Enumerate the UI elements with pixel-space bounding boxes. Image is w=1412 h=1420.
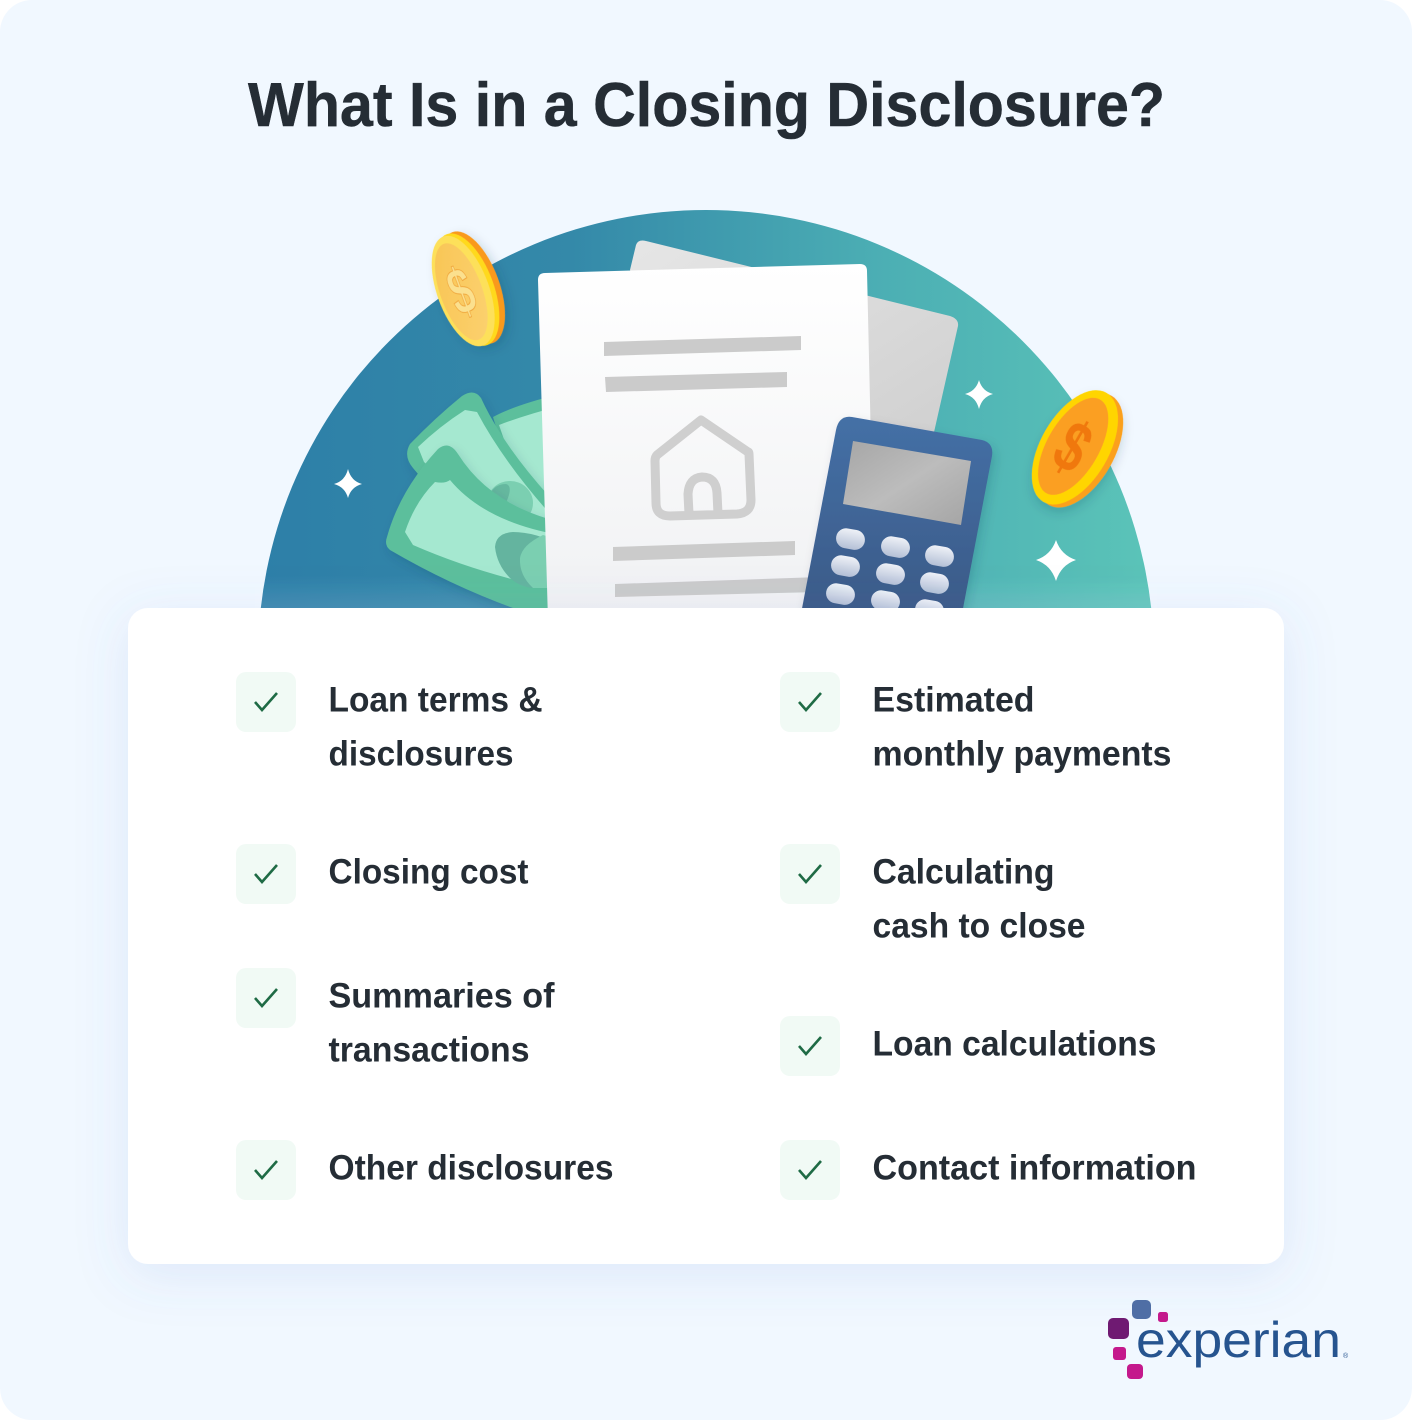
item: calculating cash to close [780,844,1086,946]
document text lines [604,336,820,597]
icon: left gold coin: $ [438,252,484,330]
item: contact information [780,1140,1196,1200]
item: estimated monthly payments: Estimated [872,680,1034,720]
item: other disclosures [236,1140,614,1200]
calculator screen [843,441,971,525]
icon: back paper [630,240,958,450]
item: other disclosures: Other disclosures [328,1148,614,1188]
item: loan terms and disclosures: disclosures [328,734,514,774]
item: closing cost [236,844,529,904]
item: estimated monthly payments: monthly payments [872,734,1172,774]
illustration: closing documents, money and calculator [260,210,1152,608]
icon: money bills [386,392,548,608]
icon: right orange coin: $ [1040,406,1105,489]
calculator keys [826,528,954,608]
panel: checklist card [128,608,1284,1264]
item: summaries of transactions: transactions [328,1030,530,1070]
icon: left gold coin [419,223,518,355]
item: loan terms and disclosures [236,672,542,774]
icon: main document [538,264,875,620]
item: calculating cash to close: cash to close [872,906,1086,946]
icon: right orange coin [1014,376,1141,522]
icon: calculator [802,416,996,608]
sparkles [334,380,1076,581]
semicircle backdrop [260,210,1152,608]
item: closing cost: Closing cost [328,852,529,892]
title: What Is in a Closing Disclosure? [248,71,1165,140]
front bill [386,445,560,608]
logo: experian [1108,1300,1349,1379]
icon: house [655,420,751,516]
item: loan terms and disclosures: Loan terms & [328,680,542,720]
logo: experian: experian [1136,1312,1341,1368]
item: estimated monthly payments [780,672,1172,774]
item: summaries of transactions: Summaries of [328,976,555,1016]
logo: experian: ® [1343,1352,1349,1360]
item: loan calculations [780,1016,1156,1076]
item: calculating cash to close: Calculating [872,852,1054,892]
item: summaries of transactions [236,968,555,1070]
front bill portrait [495,532,540,588]
back bill [493,398,542,438]
item: loan calculations: Loan calculations [872,1024,1156,1064]
item: contact information: Contact information [872,1148,1196,1188]
middle bill portrait [491,481,533,512]
middle bill [407,392,545,508]
